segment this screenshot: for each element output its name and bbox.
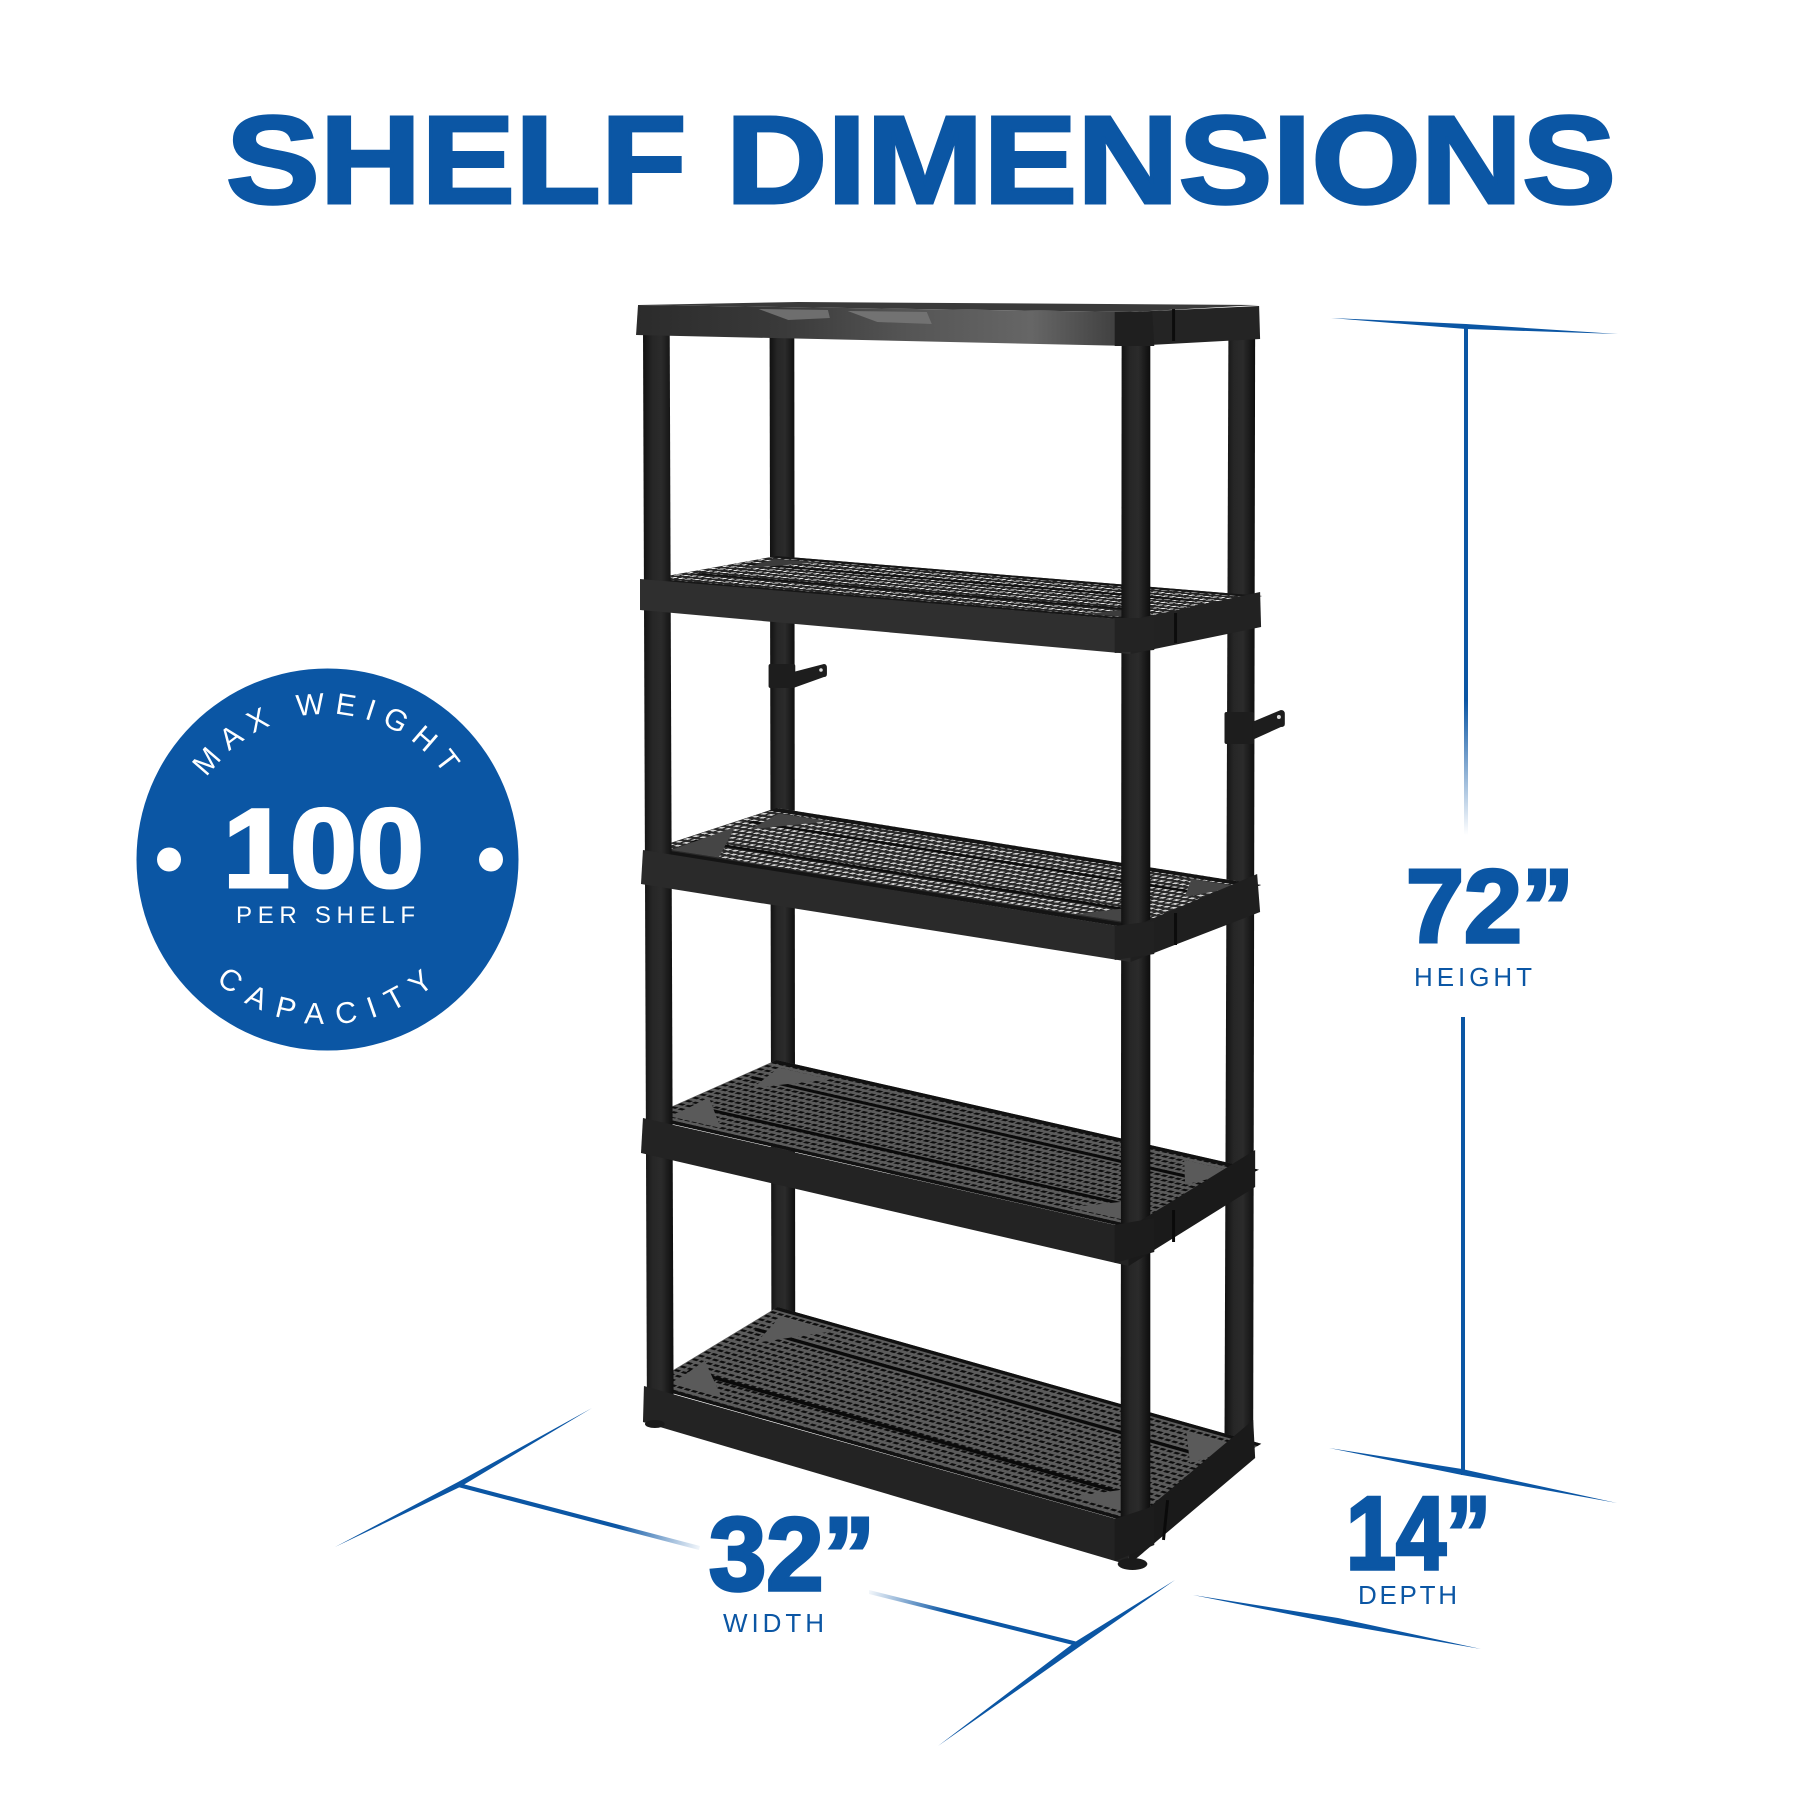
width right crossbar: [938, 1580, 1175, 1746]
weight capacity badge: [136, 668, 518, 1050]
shelf 4 front edge: [641, 1118, 1255, 1266]
depth upper crossbar: [1329, 1448, 1617, 1503]
back right post: [1224, 320, 1255, 1440]
badge curved footer: CAPACITY: [220, 968, 428, 1024]
height lower vertical line: [1461, 1017, 1465, 1475]
depth caption: DEPTH: [1358, 1580, 1457, 1610]
width left line: [458, 1483, 700, 1550]
shelving unit: [636, 302, 1285, 1570]
shelf 2 front edge: [640, 579, 1261, 654]
deck: shelf 2: [645, 556, 1262, 620]
title: SHELF DIMENSIONS: [226, 91, 1616, 230]
depth dimension arrow: [1193, 1448, 1617, 1649]
back left post: [770, 320, 795, 1400]
depth lower crossbar: [1193, 1595, 1481, 1649]
badge number: 100: [223, 786, 424, 911]
width caption: WIDTH: [723, 1608, 824, 1638]
height value: 72”: [1406, 849, 1574, 965]
front left post: [643, 320, 674, 1410]
height upper vertical line: [1464, 327, 1468, 835]
badge right dot: [479, 848, 503, 872]
shelf 3 front edge: [641, 850, 1260, 962]
width right line: [869, 1590, 1078, 1646]
depth value: 14”: [1346, 1476, 1491, 1592]
top shelf: [636, 302, 1260, 346]
badge left dot: [157, 848, 181, 872]
depth label: [1346, 1476, 1491, 1610]
width value: 32”: [709, 1497, 875, 1613]
width left crossbar: [335, 1408, 592, 1547]
front right post: [1121, 320, 1150, 1540]
width label: [709, 1497, 875, 1638]
width dimension arrow: [335, 1408, 1175, 1746]
deck: shelf 5: [647, 1307, 1261, 1523]
height dimension arrow: [1331, 318, 1618, 1475]
height caption: HEIGHT: [1414, 962, 1532, 992]
deck: shelf 4: [646, 1060, 1259, 1228]
deck: shelf 3: [646, 808, 1261, 928]
shelf 5 front edge: [643, 1386, 1255, 1570]
badge circle: [136, 668, 518, 1050]
badge subtext: PER SHELF: [236, 902, 415, 929]
height top crossbar: [1331, 318, 1618, 334]
height label: [1406, 849, 1574, 992]
badge curved heading: MAX WEIGHT: [192, 693, 461, 776]
wall bracket right: [1224, 710, 1285, 744]
wall bracket left: [769, 664, 827, 688]
